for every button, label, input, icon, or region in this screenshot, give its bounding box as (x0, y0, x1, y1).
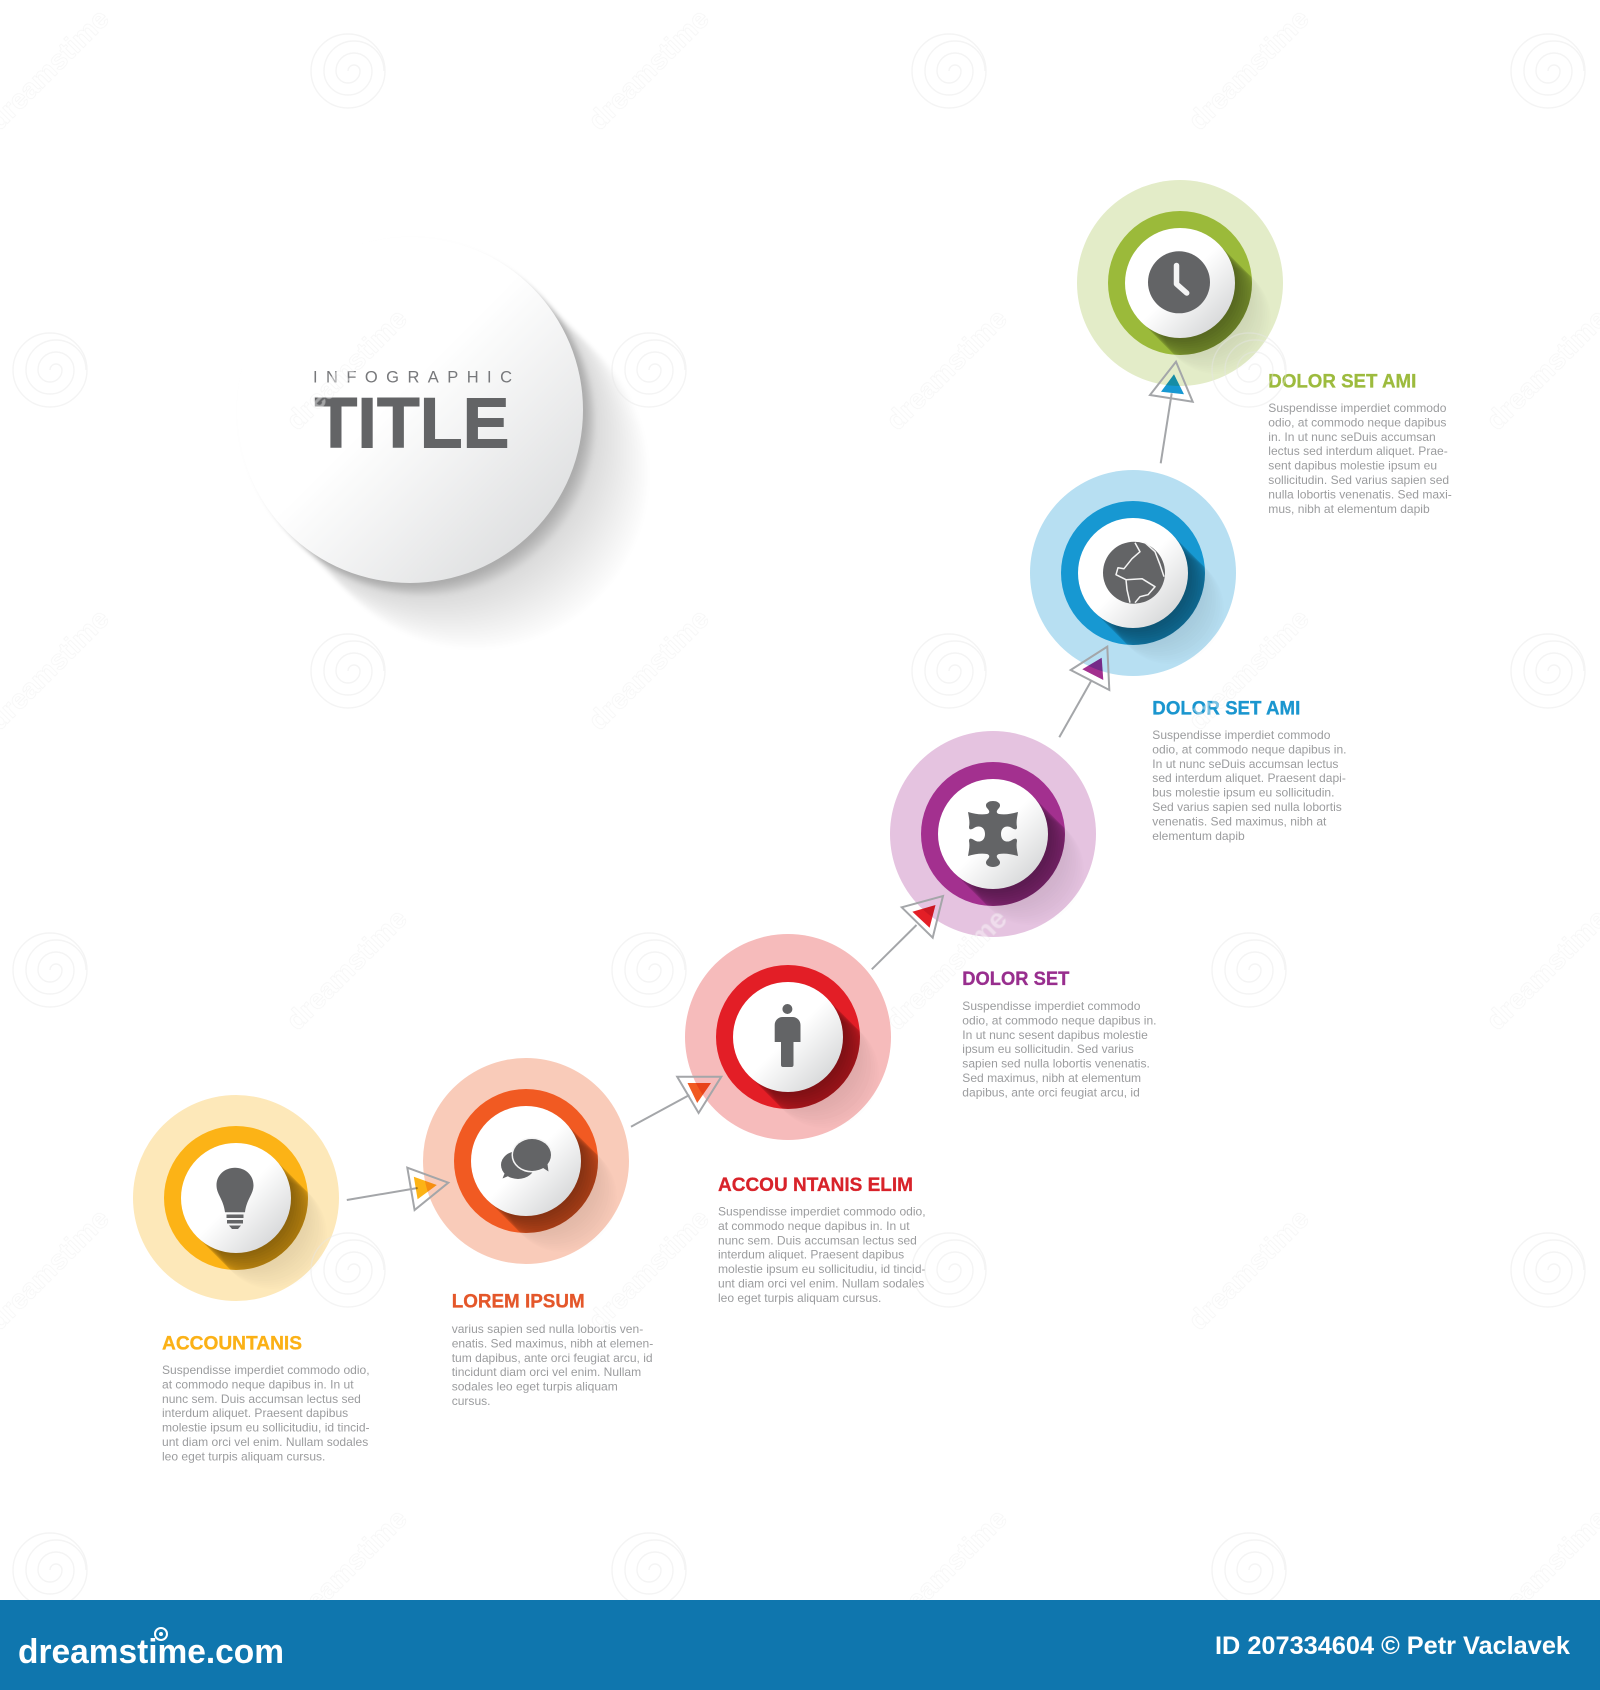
text: dolor set body: In ut nunc sesent dapibus molestie (962, 1028, 1148, 1042)
text: dolor set body: ipsum eu sollicitudin. Sed varius (962, 1042, 1134, 1056)
watermark pattern: dreamstime (280, 1503, 413, 1636)
text: dolor set body: sapien sed nulla lobortis venenatis. (962, 1057, 1150, 1071)
text: accountanis body: molestie ipsum eu sollicitudiu, id tincid- (162, 1421, 370, 1435)
text: lorem ipsum body: enatis. Sed maximus, nibh at elemen- (452, 1336, 653, 1350)
watermark pattern: dreamstime (880, 1503, 1013, 1636)
step 4: dolor set (890, 731, 1157, 1099)
arrow: step 5 to 6 (1150, 362, 1193, 463)
text: dolor set ami blue body: sed interdum aliquet. Praesent dapi- (1152, 771, 1346, 785)
text: dolor set ami green body: in. In ut nunc seDuis accumsan (1268, 430, 1436, 444)
watermark pattern: dreamstime (280, 903, 413, 1036)
text: dolor set ami green body: nulla lobortis venenatis. Sed maxi- (1268, 487, 1452, 501)
text: dolor set body: odio, at commodo neque dapibus in. (962, 1013, 1157, 1027)
footer logo: dreamstime.com (18, 1633, 284, 1671)
text: dolor set ami blue body: odio, at commodo neque dapibus in. (1152, 742, 1347, 756)
icon: speech bubbles (501, 1139, 551, 1179)
step 5: dolor set ami blue (1030, 470, 1347, 843)
text: accou ntanis elim body: molestie ipsum eu sollicitudiu, id tincid- (718, 1262, 926, 1276)
icon: clock (1148, 251, 1210, 313)
heading: dolor set ami blue: DOLOR SET AMI (1152, 697, 1300, 719)
text: lorem ipsum body: sodales leo eget turpis aliquam (452, 1380, 618, 1394)
step 1: accountanis (133, 1095, 370, 1463)
text: accountanis body: unt diam orci vel enim. Nullam sodales (162, 1435, 368, 1449)
text: dolor set ami blue body: bus molestie ipsum eu sollicitudin. (1152, 786, 1334, 800)
text: accou ntanis elim body: at commodo neque dapibus in. In ut (718, 1219, 910, 1233)
text: dolor set ami blue body: In ut nunc seDuis accumsan lectus (1152, 757, 1338, 771)
text: accountanis body: nunc sem. Duis accumsan lectus sed (162, 1392, 361, 1406)
text: dolor set ami green body: Suspendisse imperdiet commodo (1268, 401, 1447, 415)
text: accountanis body: Suspendisse imperdiet commodo odio, (162, 1363, 370, 1377)
text: accou ntanis elim body: leo eget turpis aliquam cursus. (718, 1291, 881, 1305)
icon: puzzle piece (968, 801, 1018, 867)
footer bar (0, 1600, 1600, 1690)
watermark pattern: dreamstime (1182, 603, 1315, 736)
heading: dolor set: DOLOR SET (962, 968, 1069, 990)
step 6: dolor set ami green (1077, 180, 1452, 516)
text: accou ntanis elim body: Suspendisse imperdiet commodo odio, (718, 1204, 926, 1218)
text: lorem ipsum body: cursus. (452, 1394, 491, 1408)
arrow: step 3 to 4 (872, 896, 943, 969)
heading: lorem ipsum: LOREM IPSUM (452, 1290, 585, 1312)
text: dolor set ami green body: sollicitudin. Sed varius sapien sed (1268, 473, 1449, 487)
heading: accou ntanis elim: ACCOU NTANIS ELIM (718, 1174, 913, 1196)
heading: dolor set ami green: DOLOR SET AMI (1268, 370, 1416, 392)
text: dolor set ami green body: mus, nibh at elementum dapib (1268, 502, 1430, 516)
text: dolor set ami blue body: Sed varius sapien sed nulla lobortis (1152, 800, 1342, 814)
text: dolor set body: dapibus, ante orci feugiat arcu, id (962, 1085, 1140, 1099)
title main word: TITLE (314, 385, 510, 464)
text: lorem ipsum body: tum dapibus, ante orci feugiat arcu, id (452, 1351, 653, 1365)
text: dolor set ami green body: lectus sed interdum aliquet. Prae- (1268, 444, 1448, 458)
heading: accountanis: ACCOUNTANIS (162, 1332, 302, 1354)
title small line: INFOGRAPHIC (313, 369, 512, 387)
text: dolor set ami green body: odio, at commodo neque dapibus (1268, 415, 1446, 429)
arrow: step 2 to 3 (631, 1077, 721, 1127)
text: dolor set ami blue body: venenatis. Sed maximus, nibh at (1152, 814, 1327, 828)
icon: light bulb (216, 1168, 254, 1229)
watermark pattern: dreamstime (880, 303, 1013, 436)
step 2: lorem ipsum (423, 1058, 653, 1408)
text: lorem ipsum body: varius sapien sed nulla lobortis ven- (452, 1322, 643, 1336)
arrow: step 4 to 5 (1059, 647, 1109, 737)
watermark pattern: dreamstime (1182, 1203, 1315, 1336)
icon: globe (1103, 542, 1165, 604)
watermark pattern: dreamstime (582, 3, 715, 136)
text: dolor set ami blue body: elementum dapib (1152, 829, 1245, 843)
title badge (237, 237, 648, 648)
watermark pattern: dreamstime (1182, 3, 1315, 136)
text: accou ntanis elim body: unt diam orci vel enim. Nullam sodales (718, 1276, 924, 1290)
watermark pattern: dreamstime (280, 303, 413, 436)
text: accountanis body: at commodo neque dapibus in. In ut (162, 1377, 354, 1391)
text: dolor set ami green body: sent dapibus molestie ipsum eu (1268, 459, 1437, 473)
text: accou ntanis elim body: interdum aliquet. Praesent dapibus (718, 1248, 904, 1262)
text: accountanis body: interdum aliquet. Praesent dapibus (162, 1406, 348, 1420)
text: dolor set body: Suspendisse imperdiet commodo (962, 999, 1141, 1013)
watermark pattern: dreamstime (582, 603, 715, 736)
watermark pattern: dreamstime (582, 1203, 715, 1336)
arrow: step 1 to 2 (347, 1168, 448, 1210)
footer credit: ID 207334604 © Petr Vaclavek (1215, 1632, 1570, 1660)
step 3: accou ntanis elim (685, 934, 926, 1305)
text: accou ntanis elim body: nunc sem. Duis accumsan lectus sed (718, 1233, 917, 1247)
watermark pattern: dreamstime (880, 903, 1013, 1036)
text: dolor set ami blue body: Suspendisse imperdiet commodo (1152, 728, 1331, 742)
text: lorem ipsum body: tincidunt diam orci vel enim. Nullam (452, 1365, 641, 1379)
icon: person (775, 1004, 800, 1067)
text: dolor set body: Sed maximus, nibh at elementum (962, 1071, 1141, 1085)
text: accountanis body: leo eget turpis aliquam cursus. (162, 1449, 325, 1463)
